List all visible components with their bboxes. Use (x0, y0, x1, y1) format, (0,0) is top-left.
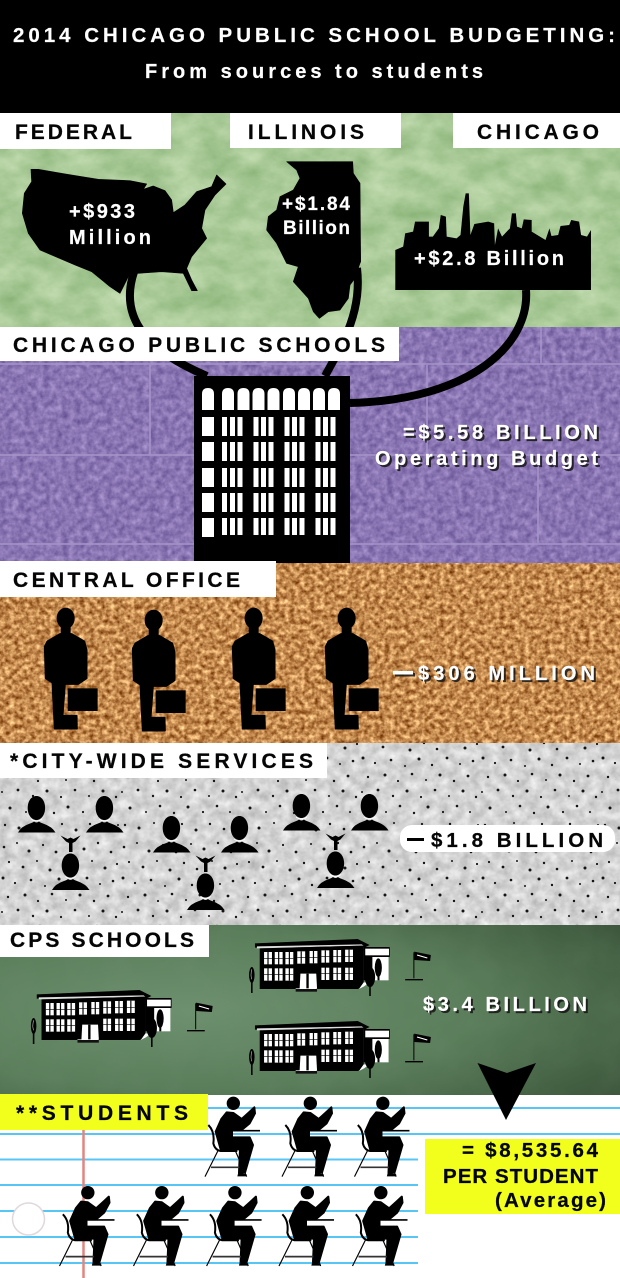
callout: per student amount: (Average) (495, 1189, 606, 1212)
heading: illinois (230, 113, 401, 148)
icon: school district building (194, 376, 350, 563)
panel: chicago public schools (0, 268, 620, 563)
panel: central office (0, 561, 620, 743)
icon: united states map with federal amount: +$933 (69, 201, 135, 223)
callout: per student amount (425, 1139, 620, 1214)
heading: chicago (453, 113, 620, 148)
city-wide services amount: $1.8 BILLION (431, 829, 603, 852)
heading: city-wide services (0, 743, 327, 778)
funding flow arrows (130, 268, 526, 403)
callout: per student amount: = $8,535.64 (462, 1139, 599, 1162)
title: 2014 CHICAGO PUBLIC SCHOOL BUDGETING: (13, 24, 615, 47)
heading: cps schools: CPS SCHOOLS (10, 929, 194, 952)
icon: chicago skyline with city amount (395, 193, 591, 290)
heading: chicago: CHICAGO (477, 121, 599, 144)
heading: illinois: ILLINOIS (248, 121, 364, 144)
cps schools amount: $3.4 BILLION (423, 994, 587, 1016)
arrow: down to students (478, 1063, 536, 1120)
heading: students: **STUDENTS (16, 1102, 188, 1125)
icon: united states map with federal amount (22, 169, 226, 293)
icons: four office workers with briefcases (45, 608, 379, 731)
panel: students notebook paper (0, 1094, 620, 1278)
icon: illinois map with state amount: Billion (283, 218, 350, 239)
panel: funding sources (0, 113, 620, 327)
heading: chicago public schools (0, 327, 399, 361)
operating budget amount: =$5.58 BILLION (403, 422, 598, 444)
operating budget amount: Operating Budget (375, 448, 598, 470)
heading: federal (0, 113, 171, 149)
header band (0, 0, 620, 113)
city-wide services amount (400, 825, 615, 852)
heading: federal: FEDERAL (15, 121, 132, 144)
heading: central office: CENTRAL OFFICE (13, 569, 240, 592)
panel: city-wide services (0, 743, 620, 925)
notebook hole (12, 1203, 44, 1235)
icon: illinois map with state amount (267, 162, 361, 318)
icons: three school buildings (31, 939, 431, 1078)
subtitle: From sources to students (145, 61, 483, 83)
heading: chicago public schools: CHICAGO PUBLIC SCHOOLS (13, 334, 385, 357)
callout: per student amount: PER STUDENT (443, 1165, 598, 1188)
operating budget amount (375, 422, 598, 470)
icon: illinois map with state amount: +$1.84 (282, 194, 350, 215)
central office amount: $306 MILLION (418, 663, 595, 685)
heading: city-wide services: *CITY-WIDE SERVICES (10, 750, 313, 773)
heading: students (0, 1094, 208, 1130)
heading: cps schools (0, 925, 209, 957)
icon: united states map with federal amount: Million (69, 227, 151, 249)
icon: chicago skyline with city amount: +$2.8 Billion (414, 248, 564, 270)
icons: three groups of connected people (18, 794, 388, 910)
panel: cps schools (0, 925, 620, 1095)
heading: central office (0, 561, 276, 597)
icons: rows of seated students (59, 1097, 409, 1266)
